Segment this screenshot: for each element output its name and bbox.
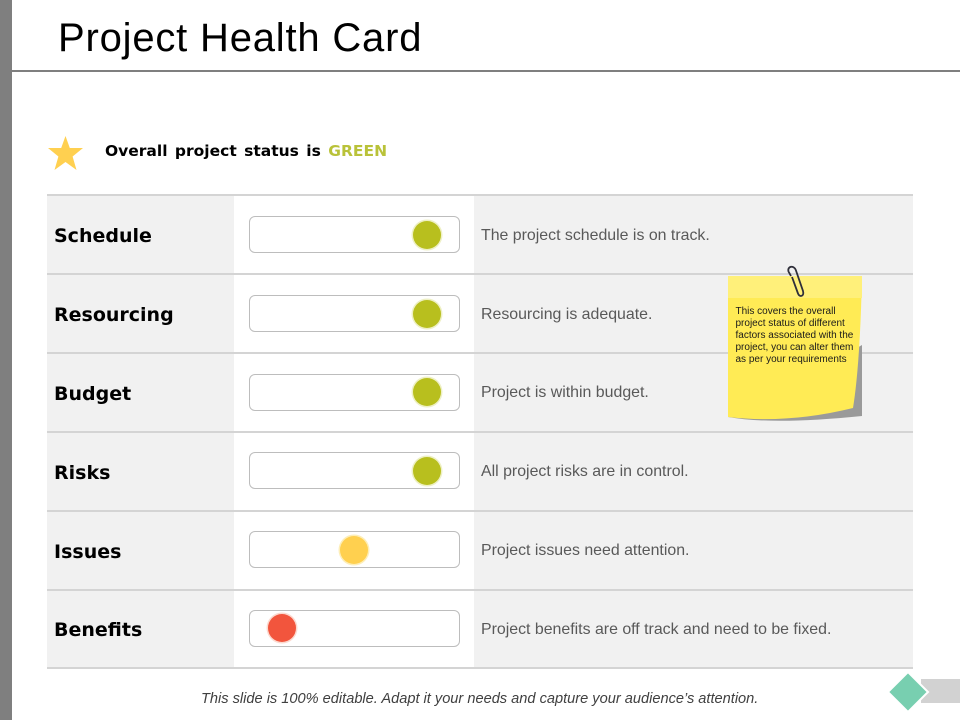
footer note: This slide is 100% editable. Adapt it your needs and capture your audience’s attention. (201, 691, 758, 707)
icon: diamond (889, 674, 930, 710)
status track: Issues (249, 531, 460, 568)
note text: project status of different (736, 318, 845, 329)
status track: Budget (249, 374, 460, 411)
sticky note (728, 266, 862, 421)
description: Budget: Project is within budget. (481, 384, 649, 401)
description: Schedule: The project schedule is on track. (481, 227, 710, 244)
status dot: red (268, 614, 296, 642)
label: Issues: Issues (54, 541, 121, 563)
label: Benefits: Benefits (54, 619, 142, 641)
overall status text: Overall project status is GREEN (105, 142, 387, 160)
title underline (12, 70, 960, 72)
page number tab (921, 679, 960, 703)
status track: Benefits (249, 610, 460, 647)
icon: star (48, 136, 83, 170)
description: Issues: Project issues need attention. (481, 542, 689, 559)
left side bar (0, 0, 12, 720)
note text: This covers the overall (736, 306, 836, 317)
icon: paperclip (788, 267, 803, 296)
description: Benefits: Project benefits are off track and need to be fixed. (481, 621, 831, 638)
row: Risks (54, 452, 689, 489)
note text (736, 306, 853, 365)
status dot: green (413, 457, 441, 485)
status track: Resourcing (249, 295, 460, 332)
note text: as per your requirements (736, 354, 847, 365)
status track: Schedule (249, 216, 460, 253)
description: Resourcing: Resourcing is adequate. (481, 306, 652, 323)
status dot: green (413, 300, 441, 328)
label: Schedule: Schedule (54, 225, 152, 247)
label: Budget: Budget (54, 383, 131, 405)
status track: Risks (249, 452, 460, 489)
status dot: green (413, 378, 441, 406)
description: Risks: All project risks are in control. (481, 463, 689, 480)
note shape (728, 266, 862, 421)
status dot: green (413, 221, 441, 249)
label: Resourcing: Resourcing (54, 304, 174, 326)
note text: factors associated with the (736, 330, 853, 341)
status dot: amber (340, 536, 368, 564)
note text: project, you can alter them (736, 342, 853, 353)
row: Resourcing (54, 295, 652, 332)
label: Risks: Risks (54, 462, 110, 484)
title: Project Health Card (58, 16, 422, 60)
row: Budget (54, 374, 649, 411)
row: Schedule (54, 216, 710, 253)
